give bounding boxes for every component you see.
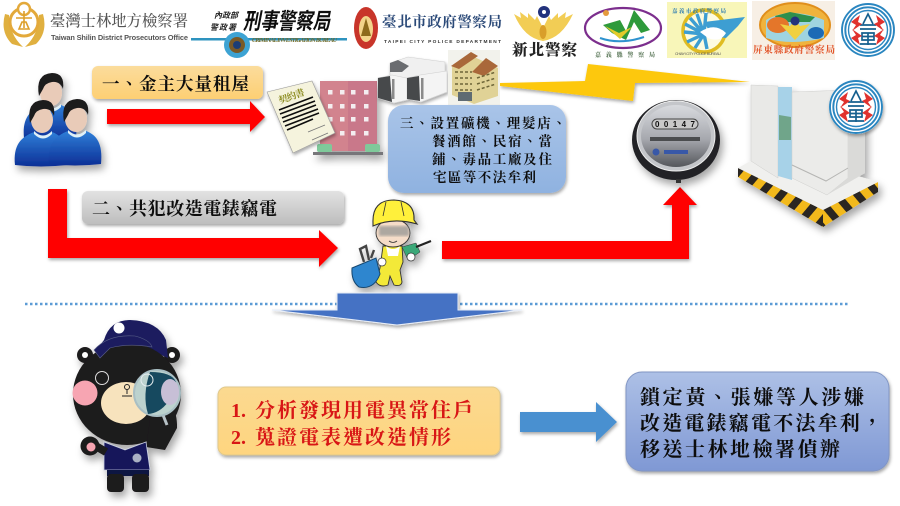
- icon: worker: [352, 200, 431, 287]
- icon: financiers group: [15, 73, 101, 166]
- step two label: 二、共犯改造電錶竊電: [92, 198, 277, 219]
- logo strip: [4, 1, 895, 60]
- conclusion box: 移送士林地檢署偵辦: [640, 438, 840, 461]
- step one label: [92, 66, 263, 99]
- arrow: financiers to rental: [107, 101, 265, 132]
- logo: Criminal Investigation Bureau: [191, 9, 347, 58]
- arrow: worker to meter: [442, 187, 697, 259]
- investigation actions box: 分析發現用電異常住戶: [255, 398, 473, 422]
- investigation actions box: 蒐證電表遭改造情形: [255, 425, 451, 449]
- logo: Pingtung County Police: [752, 1, 835, 60]
- step three label: [388, 105, 566, 193]
- arrow: accomplices to worker: [48, 189, 338, 267]
- conclusion box: 改造電錶竊電不法牟利，: [640, 411, 882, 435]
- logo: Criminal Investigation Bureau: 刑事警察局: [243, 9, 332, 35]
- investigation actions box: 2.: [231, 427, 246, 449]
- conclusion box: [626, 372, 889, 471]
- conclusion box: 鎖定黃、張嫌等人涉嫌: [640, 386, 864, 409]
- step one label: 一、金主大量租屋: [102, 74, 250, 94]
- icon: electric meter: [632, 100, 720, 183]
- logo: New Taipei Police: 新北警察: [512, 40, 577, 59]
- icon: tan apartment building: [448, 50, 500, 106]
- logo: Pingtung County Police: 屏東縣政府警察局: [753, 44, 835, 56]
- investigation actions box: 1.: [231, 400, 246, 422]
- dotted divider: [25, 303, 850, 305]
- icon: rental contract: [267, 81, 335, 153]
- icon: mining machines: [378, 57, 447, 103]
- logo: Shilin District Prosecutors Office: [4, 3, 188, 47]
- logo: Taipower: [841, 3, 895, 57]
- logo: Shilin District Prosecutors Office: Taiwan Shilin District Prosecutors Office: [51, 33, 188, 42]
- logo: Taipei City Police: 臺北市政府警察局: [382, 13, 502, 31]
- step three label: 三、設置礦機、理髮店、: [400, 115, 566, 131]
- step three label: 餐酒館、民宿、當: [432, 133, 552, 149]
- step three label: 鋪、毒品工廠及住: [432, 151, 552, 167]
- logo: Criminal Investigation Bureau: CRIMINAL INVESTIGATION BUREAU: [252, 38, 338, 44]
- step three label: 宅區等不法牟利: [433, 169, 536, 185]
- logo: Shilin District Prosecutors Office: 臺灣士林地方檢察署: [50, 12, 188, 30]
- icon: electric meter: 0 0 1 4 7: [655, 120, 696, 129]
- logo: Taipei City Police: [354, 7, 502, 49]
- logo: Chiayi County Police: 嘉義縣警察局: [595, 51, 655, 59]
- icon: transformer on hazard base: [738, 85, 878, 227]
- logo: Taipei City Police: TAIPEI CITY POLICE DEPARTMENT: [384, 39, 501, 45]
- logo: Chiayi City Police: [667, 2, 747, 58]
- icon: rental contract: 契約書: [277, 86, 307, 107]
- icon: lightning bolt: [500, 64, 750, 101]
- logo: Criminal Investigation Bureau: 內政部: [214, 11, 240, 20]
- icon: police bear mascot: [72, 320, 181, 492]
- logo: Chiayi City Police: CHIAYI CITY POLICE BUREAU: [675, 52, 721, 56]
- arrow: large blue down arrow: [272, 293, 522, 325]
- logo: Chiayi County Police: [585, 8, 661, 59]
- logo: New Taipei Police: [512, 6, 577, 59]
- icon: pink building: [313, 81, 383, 155]
- logo: Criminal Investigation Bureau: 警政署: [210, 23, 237, 32]
- investigation actions box: [218, 387, 500, 455]
- arrow: blue right arrow: [520, 402, 617, 442]
- logo: Taipower badge: [829, 80, 883, 134]
- logo: Chiayi City Police: 嘉義市政府警察局: [672, 7, 726, 15]
- step two label: [82, 191, 344, 224]
